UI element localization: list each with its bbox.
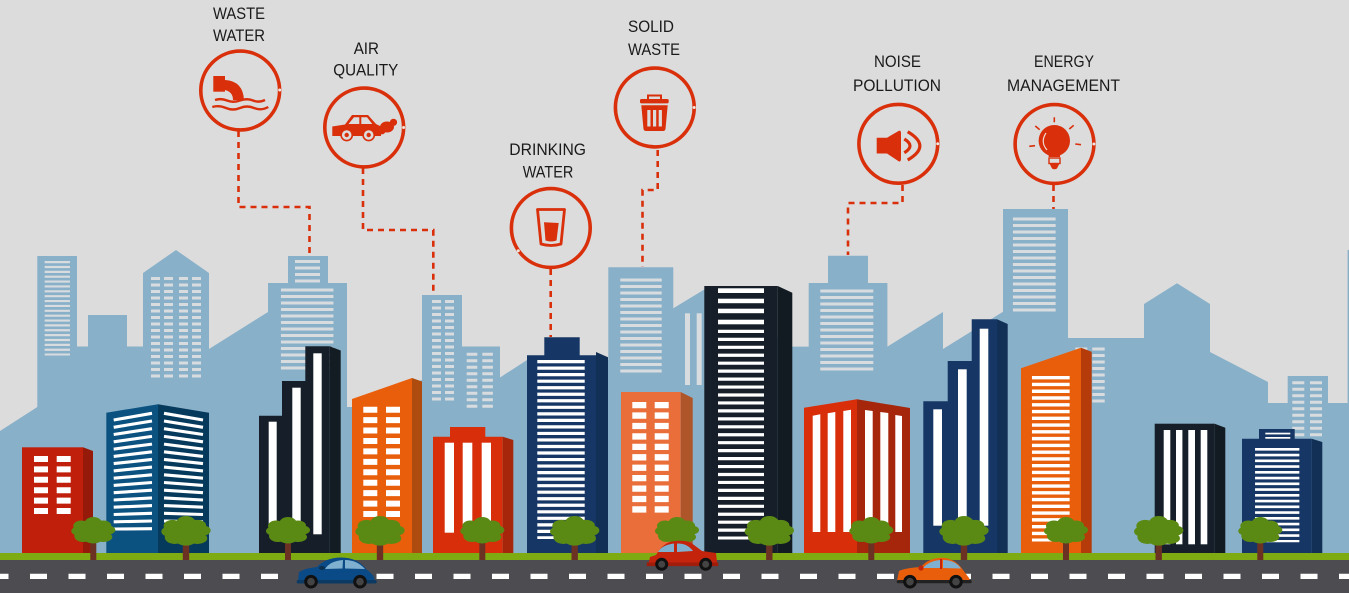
grass strip	[0, 553, 1349, 560]
icon: energy light bulb circle	[1015, 105, 1095, 183]
icon: waste water circle	[201, 51, 281, 130]
icon: solid waste bin circle	[615, 68, 696, 147]
trees along the road	[71, 516, 1282, 560]
connector: energy management	[1052, 185, 1055, 209]
building: small navy tower	[1242, 429, 1322, 553]
label: energy management	[1007, 53, 1120, 95]
label: air quality: AIR	[354, 40, 379, 58]
icon: drinking water glass circle	[511, 189, 590, 267]
building: black block with four columns	[1155, 424, 1225, 553]
building: red block with vertical windows	[433, 427, 513, 553]
label: energy management: ENERGY	[1034, 53, 1094, 71]
road	[0, 560, 1349, 593]
label: noise pollution: POLLUTION	[853, 77, 941, 95]
car: blue	[297, 558, 377, 588]
label: drinking water	[509, 141, 586, 182]
building: small red block	[22, 447, 93, 553]
building: blue corner tower	[106, 404, 209, 553]
building: navy tower	[527, 337, 608, 553]
label: drinking water: WATER	[523, 164, 573, 182]
connector: noise pollution	[848, 185, 902, 255]
building: tall black tower	[704, 286, 792, 553]
building: light orange block	[621, 392, 693, 553]
label: air quality	[333, 40, 398, 79]
building: navy stepped tower	[923, 319, 1008, 553]
connector: solid waste	[642, 150, 658, 267]
label: solid waste: SOLID	[628, 18, 674, 36]
building: black stepped tower	[259, 346, 341, 553]
car: red	[647, 541, 718, 571]
label: solid waste: WASTE	[628, 41, 680, 59]
label: air quality: QUALITY	[333, 61, 398, 79]
connector: air quality	[363, 168, 433, 295]
label: noise pollution	[853, 53, 941, 95]
car: orange	[897, 558, 972, 588]
building: red corner block	[804, 399, 910, 553]
icon: air quality car circle	[325, 88, 405, 167]
icon: noise speaker circle	[859, 104, 939, 183]
background skyline	[0, 209, 1349, 553]
building: orange striped tower	[1021, 348, 1092, 553]
label: solid waste	[628, 18, 680, 59]
label: waste water	[213, 5, 265, 45]
connector: drinking water	[549, 269, 552, 337]
label: waste water: WASTE	[213, 5, 265, 23]
label: waste water: WATER	[213, 27, 265, 45]
label: noise pollution: NOISE	[874, 53, 921, 71]
building: orange sloped tower	[352, 378, 422, 553]
connector: waste water	[238, 131, 310, 256]
label: drinking water: DRINKING	[509, 141, 586, 159]
label: energy management: MANAGEMENT	[1007, 77, 1120, 95]
